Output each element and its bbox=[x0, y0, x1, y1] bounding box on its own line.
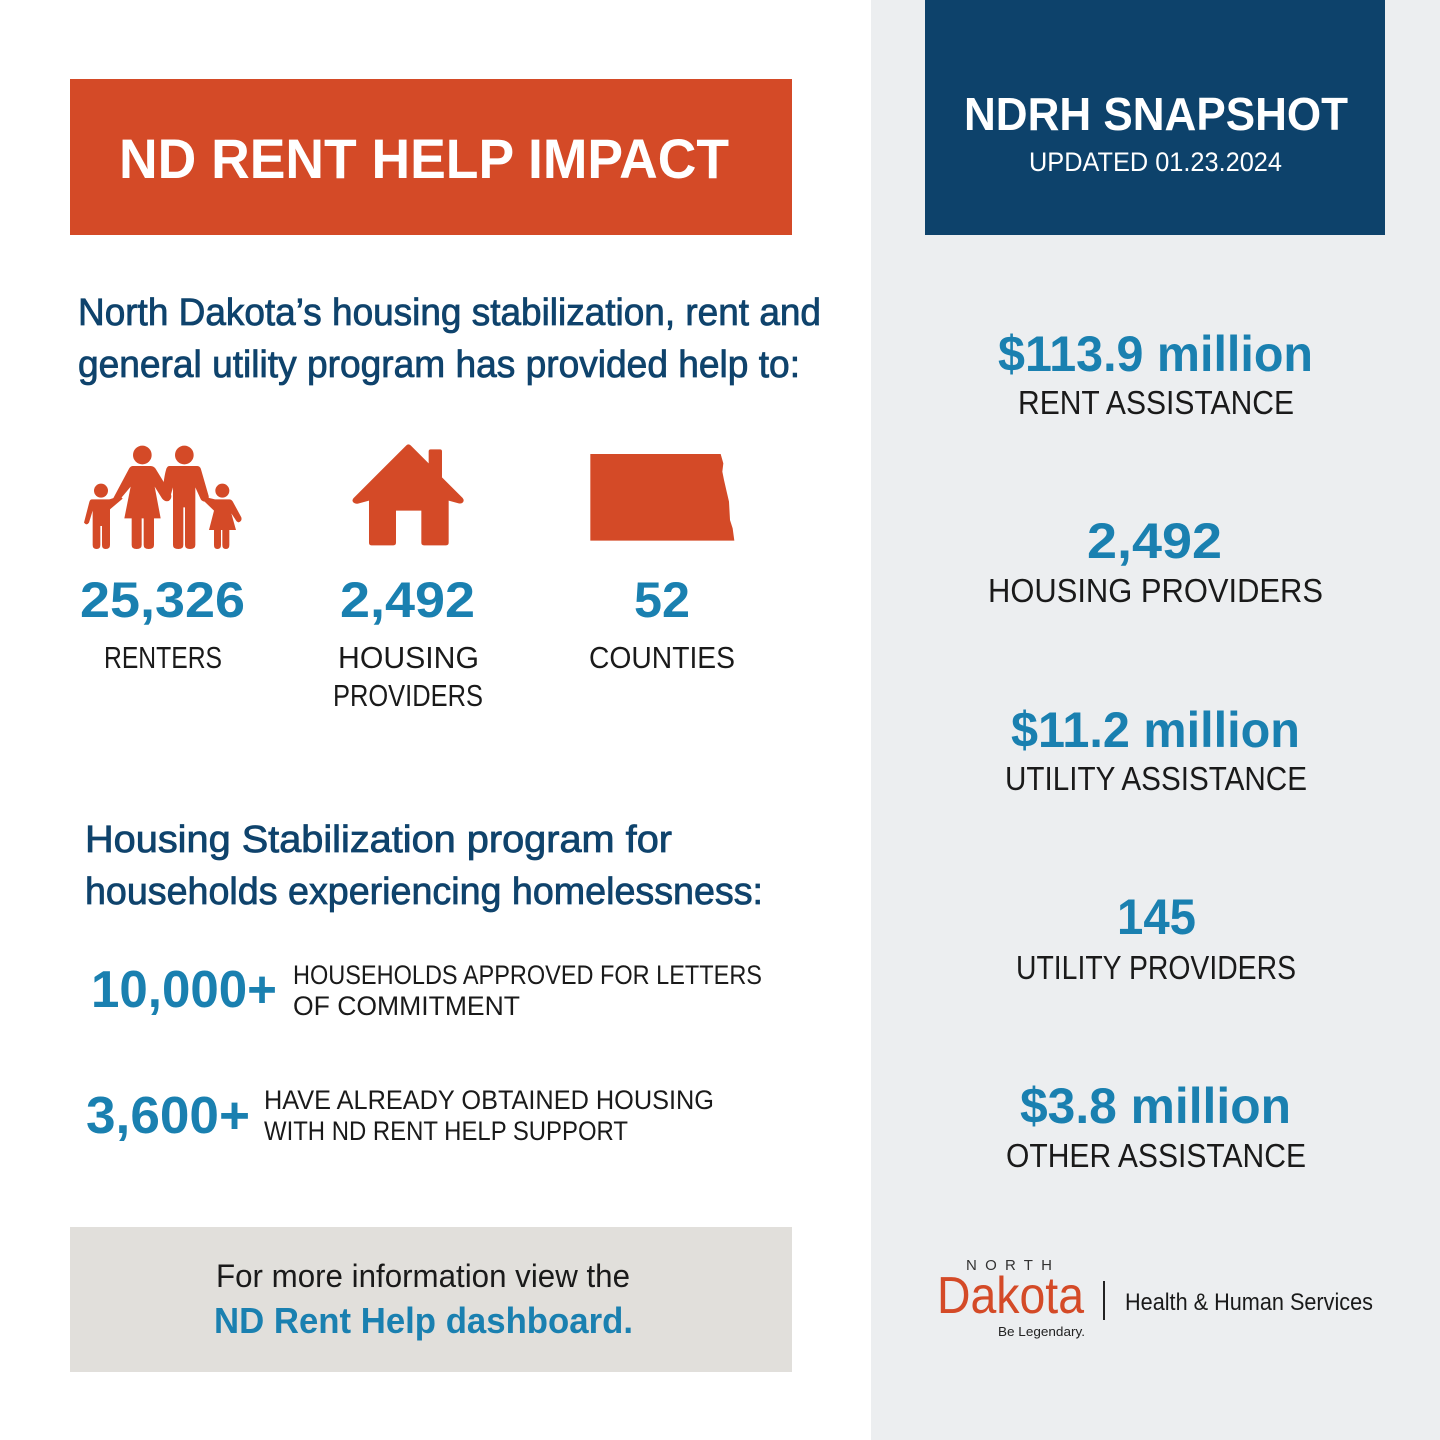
title: ND RENT HELP IMPACT bbox=[119, 127, 729, 190]
metric: housing providers bbox=[333, 444, 483, 713]
stat description: OF COMMITMENT bbox=[293, 991, 520, 1021]
stat description bbox=[293, 960, 762, 1021]
value: 25,326 bbox=[80, 572, 245, 628]
housing stabilization heading bbox=[85, 819, 763, 913]
stat: rent assistance: $113.9 million bbox=[998, 326, 1313, 382]
stat: households approved: 10,000+ bbox=[91, 961, 277, 1019]
stat: rent assistance: RENT ASSISTANCE bbox=[1018, 384, 1294, 421]
stat: housing providers: 2,492 bbox=[1087, 513, 1222, 569]
stat: utility providers: 145 bbox=[1117, 889, 1196, 945]
stat: other assistance: OTHER ASSISTANCE bbox=[1006, 1137, 1306, 1174]
stat: utility providers bbox=[1016, 889, 1296, 986]
caption: RENTERS bbox=[104, 640, 222, 675]
stat: obtained housing: 3,600+ bbox=[86, 1087, 250, 1145]
callout text: For more information view the bbox=[216, 1258, 630, 1294]
logo: North Dakota Health & Human Services: Dakota bbox=[937, 1267, 1084, 1325]
stat: housing providers: HOUSING PROVIDERS bbox=[988, 572, 1323, 609]
snapshot updated date: UPDATED 01.23.2024 bbox=[1029, 147, 1282, 177]
intro text bbox=[78, 292, 821, 386]
caption bbox=[333, 640, 483, 713]
icon: family bbox=[84, 446, 242, 549]
logo: North Dakota Health & Human Services: Health & Human Services bbox=[1125, 1289, 1373, 1316]
stat: other assistance bbox=[1006, 1078, 1306, 1174]
housing stabilization heading: Housing Stabilization program for bbox=[85, 819, 672, 861]
logo: North Dakota Health & Human Services: NORTH bbox=[966, 1257, 1052, 1274]
stat: rent assistance bbox=[998, 326, 1313, 421]
logo: North Dakota Health & Human Services: Be Legendary. bbox=[998, 1324, 1085, 1339]
metric: renters bbox=[80, 446, 245, 675]
metric: counties bbox=[589, 454, 735, 675]
snapshot heading: NDRH SNAPSHOT bbox=[964, 88, 1348, 140]
caption: PROVIDERS bbox=[333, 678, 483, 713]
callout link: ND Rent Help dashboard. bbox=[214, 1300, 633, 1341]
title banner bbox=[70, 79, 792, 235]
callout: more information bbox=[70, 1227, 792, 1372]
value: 52 bbox=[634, 572, 690, 628]
icon: North Dakota map bbox=[590, 454, 734, 541]
stat: housing providers bbox=[988, 513, 1323, 609]
caption: HOUSING bbox=[338, 640, 479, 675]
stat: utility assistance: UTILITY ASSISTANCE bbox=[1005, 760, 1307, 797]
logo: North Dakota Health & Human Services bbox=[937, 1257, 1373, 1339]
housing stabilization heading: households experiencing homelessness: bbox=[85, 871, 763, 913]
stat: utility assistance: $11.2 million bbox=[1011, 702, 1300, 758]
snapshot header box bbox=[925, 0, 1385, 235]
stat: households approved bbox=[91, 960, 762, 1021]
stat: utility assistance bbox=[1005, 702, 1307, 797]
stat description: HAVE ALREADY OBTAINED HOUSING bbox=[264, 1085, 714, 1115]
stat description bbox=[264, 1085, 714, 1146]
stat description: HOUSEHOLDS APPROVED FOR LETTERS bbox=[293, 960, 762, 990]
stat: utility providers: UTILITY PROVIDERS bbox=[1016, 949, 1296, 986]
stat description: WITH ND RENT HELP SUPPORT bbox=[264, 1116, 628, 1146]
stat: obtained housing bbox=[86, 1085, 714, 1146]
intro text: general utility program has provided help to: bbox=[78, 344, 800, 386]
intro text: North Dakota’s housing stabilization, rent and bbox=[78, 292, 821, 334]
panel: NDRH snapshot sidebar bbox=[871, 0, 1440, 1440]
caption: COUNTIES bbox=[589, 640, 735, 675]
value: 2,492 bbox=[340, 572, 475, 628]
stat: other assistance: $3.8 million bbox=[1020, 1078, 1291, 1134]
icon: house bbox=[352, 444, 464, 545]
